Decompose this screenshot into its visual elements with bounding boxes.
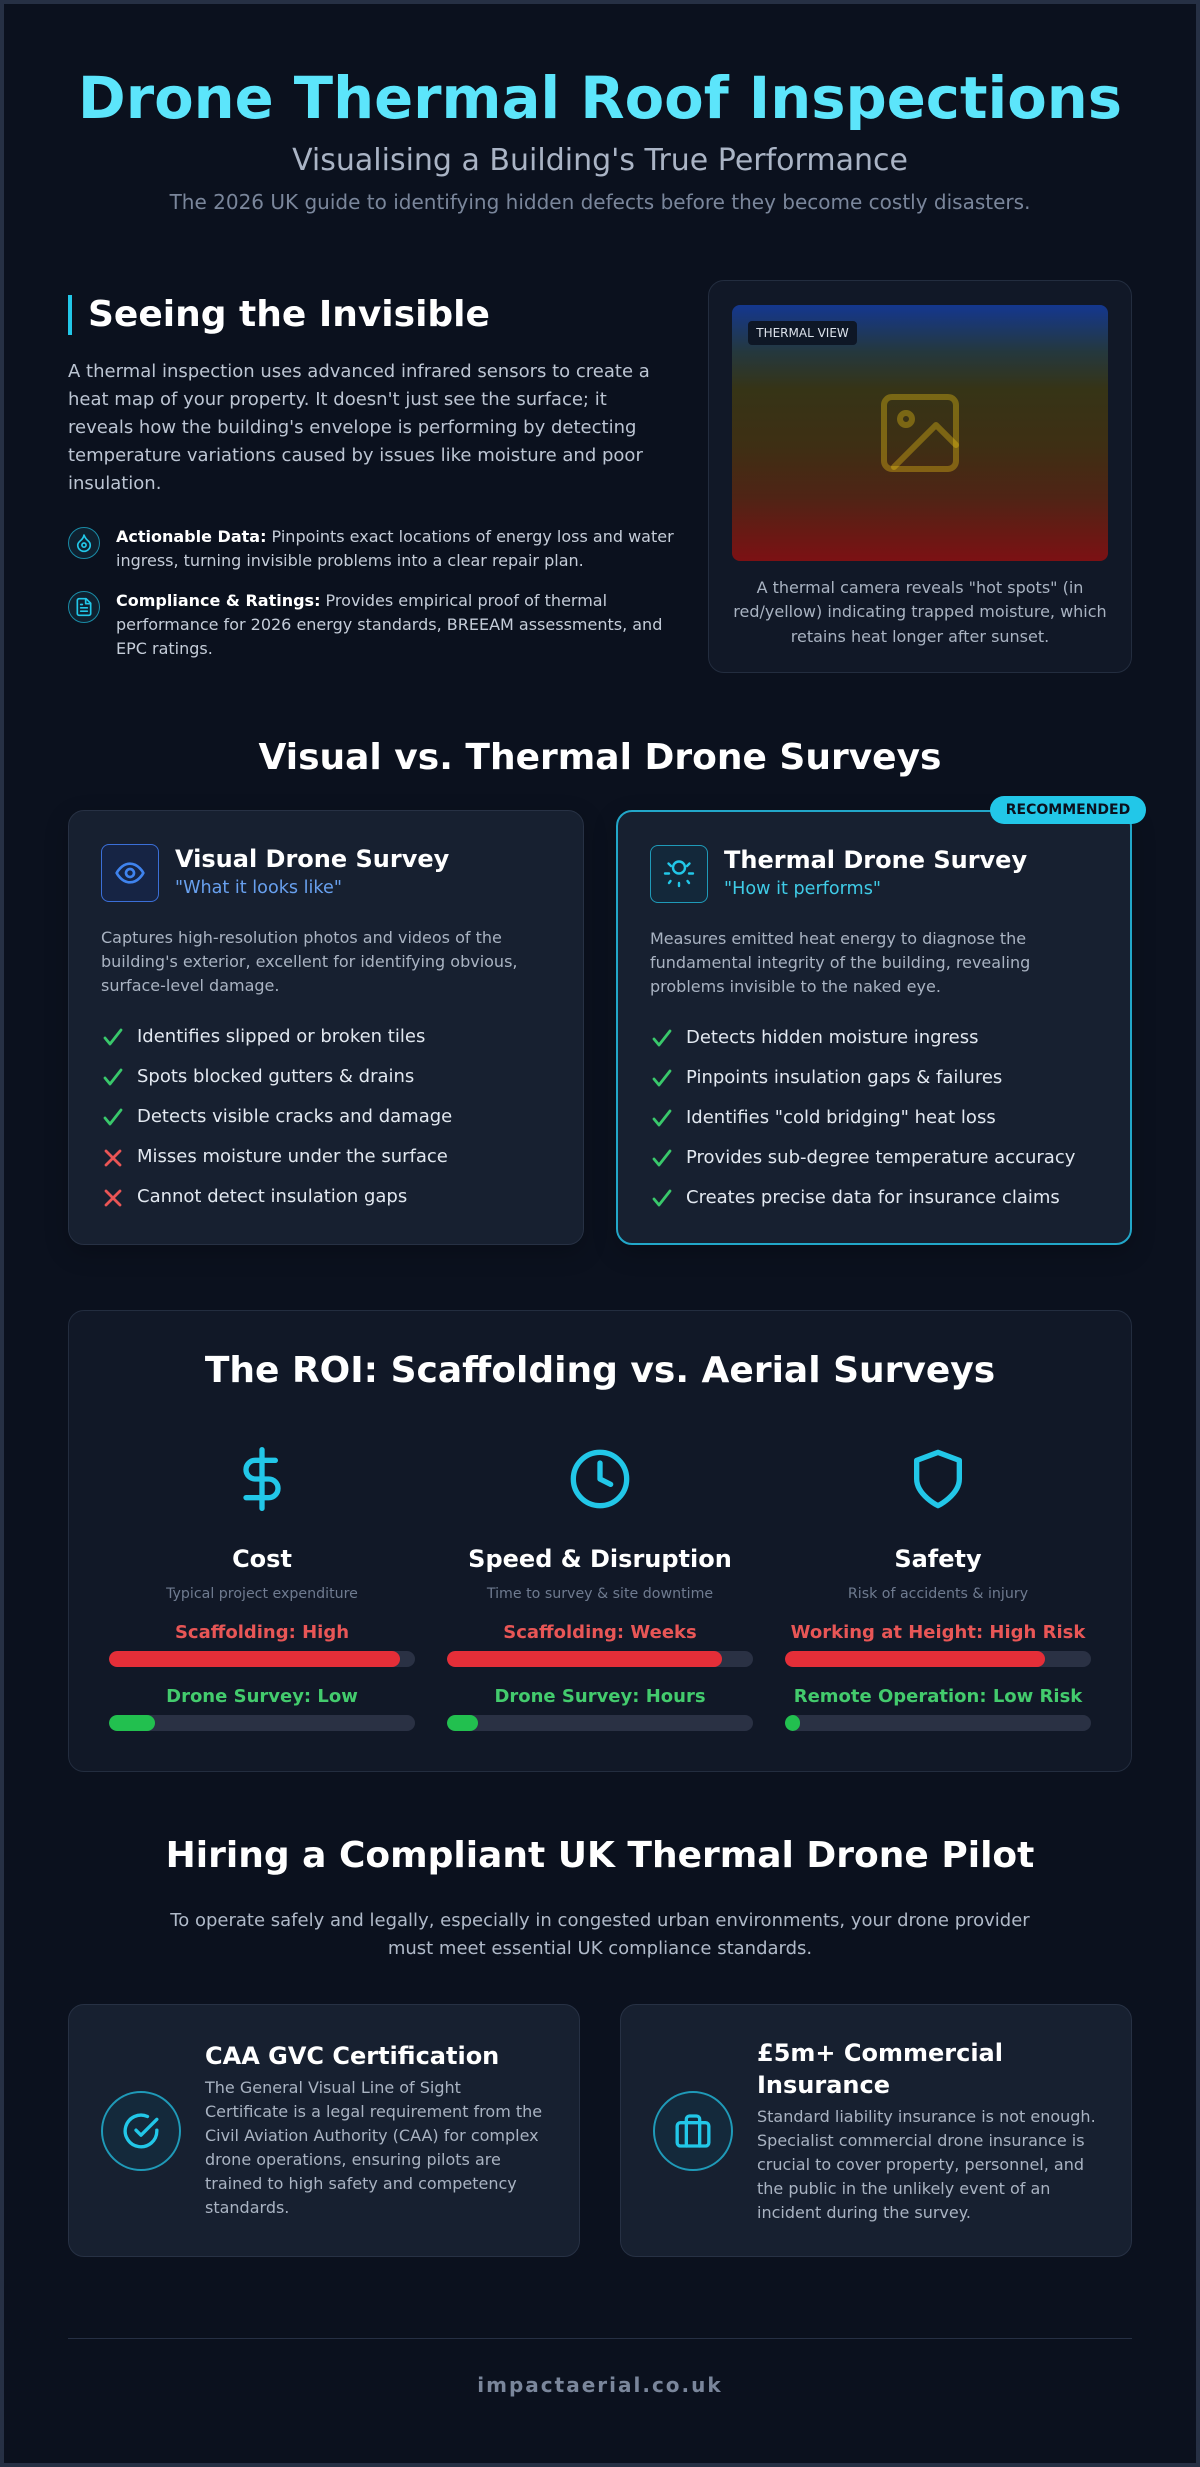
card description <box>650 929 1030 996</box>
card title: Insurance <box>757 2071 890 2099</box>
intro paragraph <box>68 361 650 494</box>
heading: visual vs thermal: Visual vs. Thermal Drone Surveys <box>259 737 941 778</box>
card body: Standard liability insurance is not enough. <box>757 2107 1096 2126</box>
card body: the public in the unlikely event of an <box>757 2179 1050 2198</box>
label: drone: Drone Survey: Hours <box>494 1686 706 1707</box>
card body: crucial to cover property, personnel, and <box>757 2155 1084 2174</box>
column: safety <box>785 1450 1091 1731</box>
card description <box>101 928 518 995</box>
card title: Thermal Drone Survey <box>724 846 1027 874</box>
ROI heading: The ROI: Scaffolding vs. Aerial Surveys <box>205 1350 995 1391</box>
icon: document <box>68 591 100 623</box>
icon: dollar <box>243 1447 281 1511</box>
bullet text: ingress, turning invisible problems into a clear repair plan. <box>116 551 584 570</box>
bar: height <box>785 1651 1091 1667</box>
bullet text <box>116 527 674 570</box>
intro paragraph: A thermal inspection uses advanced infrared sensors to create a <box>68 361 650 382</box>
icon: heat sun <box>650 845 708 903</box>
card description: Captures high-resolution photos and videos of the <box>101 928 502 947</box>
card description: fundamental integrity of the building, revealing <box>650 953 1030 972</box>
card title: £5m+ Commercial <box>757 2039 1003 2067</box>
item: visible cracks: Detects visible cracks and damage <box>137 1106 452 1127</box>
card title: Visual Drone Survey <box>175 845 449 873</box>
column: cost <box>109 1447 415 1731</box>
bar: scaffolding <box>109 1651 415 1667</box>
bar: scaffolding <box>447 1651 753 1667</box>
label: remote: Remote Operation: Low Risk <box>794 1686 1082 1707</box>
image caption: retains heat longer after sunset. <box>791 627 1049 646</box>
card description: surface-level damage. <box>101 976 279 995</box>
hiring intro text: To operate safely and legally, especially in congested urban environments, your drone provider <box>170 1910 1030 1931</box>
card body: trained to high safety and competency <box>205 2174 517 2193</box>
column: speed <box>447 1450 753 1731</box>
image caption <box>733 578 1107 646</box>
card body: Civil Aviation Authority (CAA) for complex <box>205 2126 539 2145</box>
subtitle: Visualising a Building's True Performance <box>292 143 908 178</box>
item: moisture ingress: Detects hidden moisture ingress <box>686 1027 978 1048</box>
card body <box>204 2078 542 2217</box>
feature list <box>104 1026 452 1207</box>
icon: water drop <box>68 527 100 559</box>
item: temperature accuracy: Provides sub-degree temperature accuracy <box>686 1147 1075 1168</box>
column subtitle: Risk of accidents & injury <box>848 1586 1028 1602</box>
bullet text: Actionable Data: Pinpoints exact locations of energy loss and water <box>116 527 674 546</box>
icon: eye <box>101 844 159 902</box>
feature list <box>652 1027 1075 1208</box>
thermal gradient image <box>732 305 1108 561</box>
footer website: impactaerial.co.uk <box>477 2373 723 2397</box>
card body: incident during the survey. <box>757 2203 971 2222</box>
label: scaffolding: Scaffolding: Weeks <box>503 1622 697 1643</box>
label: drone: Drone Survey: Low <box>166 1686 358 1707</box>
bullet text: EPC ratings. <box>116 639 213 658</box>
icon: shield <box>914 1450 962 1508</box>
icon: clock <box>570 1450 630 1508</box>
column title: Safety <box>894 1545 982 1573</box>
icon: image placeholder <box>881 394 959 472</box>
panel: ROI comparison <box>68 1310 1132 1772</box>
card body <box>757 2107 1096 2222</box>
heading with accent bar: Seeing the Invisible <box>88 294 490 335</box>
bar: remote <box>785 1715 1091 1731</box>
bullet text: Compliance & Ratings: Provides empirical proof of thermal <box>116 591 607 610</box>
intro paragraph: heat map of your property. It doesn't just see the surface; it <box>68 389 607 410</box>
bullet: actionable data <box>68 527 674 570</box>
panel: CAA certification <box>68 2004 580 2257</box>
column title: Speed & Disruption <box>468 1545 732 1573</box>
item: cold bridging: Identifies "cold bridging" heat loss <box>686 1107 996 1128</box>
card title: CAA GVC Certification <box>205 2042 499 2070</box>
bullet text: performance for 2026 energy standards, BREEAM assessments, and <box>116 615 662 634</box>
image caption: red/yellow) indicating trapped moisture, which <box>733 602 1107 621</box>
heading: hiring a pilot: Hiring a Compliant UK Thermal Drone Pilot <box>166 1835 1034 1876</box>
thermal view label <box>748 321 857 345</box>
header <box>78 65 1122 214</box>
card description: Measures emitted heat energy to diagnose the <box>650 929 1026 948</box>
image caption: A thermal camera reveals "hot spots" (in <box>757 578 1083 597</box>
icon: briefcase <box>653 2091 733 2171</box>
intro paragraph: reveals how the building's envelope is performing by detecting <box>68 417 636 438</box>
icon: badge check <box>101 2091 181 2171</box>
thermal view label: THERMAL VIEW <box>756 326 849 340</box>
panel: thermal view <box>708 280 1132 673</box>
card description: building's exterior, excellent for identifying obvious, <box>101 952 518 971</box>
section: seeing the invisible <box>68 294 674 658</box>
footer <box>68 2338 1132 2408</box>
item: insurance data: Creates precise data for insurance claims <box>686 1187 1060 1208</box>
item: no insulation gaps: Cannot detect insulation gaps <box>137 1186 407 1207</box>
bullet text <box>116 591 662 658</box>
panel: thermal drone survey <box>616 810 1132 1245</box>
hiring intro text: must meet essential UK compliance standards. <box>388 1938 812 1959</box>
column subtitle: Time to survey & site downtime <box>487 1586 713 1602</box>
card title <box>757 2039 1003 2099</box>
panel: commercial insurance <box>620 2004 1132 2257</box>
label: height: Working at Height: High Risk <box>791 1622 1085 1643</box>
title: Drone Thermal Roof Inspections <box>78 65 1122 132</box>
hiring intro text <box>170 1910 1030 1959</box>
card tagline: "How it performs" <box>724 879 881 899</box>
item: slipped tiles: Identifies slipped or broken tiles <box>137 1026 425 1047</box>
label: scaffolding: Scaffolding: High <box>175 1622 349 1643</box>
intro paragraph: temperature variations caused by issues like moisture and poor <box>68 445 643 466</box>
card body: Certificate is a legal requirement from the <box>205 2102 542 2121</box>
item: misses moisture: Misses moisture under the surface <box>137 1146 448 1167</box>
card tagline: "What it looks like" <box>175 878 342 898</box>
recommended badge <box>990 796 1146 824</box>
tagline: The 2026 UK guide to identifying hidden defects before they become costly disasters. <box>170 190 1030 214</box>
card description: problems invisible to the naked eye. <box>650 977 941 996</box>
card body: The General Visual Line of Sight <box>205 2078 461 2097</box>
bar: drone <box>109 1715 415 1731</box>
recommended badge: RECOMMENDED <box>1006 802 1130 818</box>
bullet: compliance and ratings <box>68 591 662 658</box>
card body: Specialist commercial drone insurance is <box>757 2131 1085 2150</box>
intro paragraph: insulation. <box>68 473 161 494</box>
item: blocked gutters: Spots blocked gutters & drains <box>137 1066 414 1087</box>
bar: drone <box>447 1715 753 1731</box>
card body: standards. <box>205 2198 289 2217</box>
column subtitle: Typical project expenditure <box>166 1586 358 1602</box>
item: insulation gaps: Pinpoints insulation gaps & failures <box>686 1067 1002 1088</box>
column title: Cost <box>232 1545 292 1573</box>
card body: drone operations, ensuring pilots are <box>205 2150 501 2169</box>
panel: visual drone survey <box>68 810 584 1245</box>
